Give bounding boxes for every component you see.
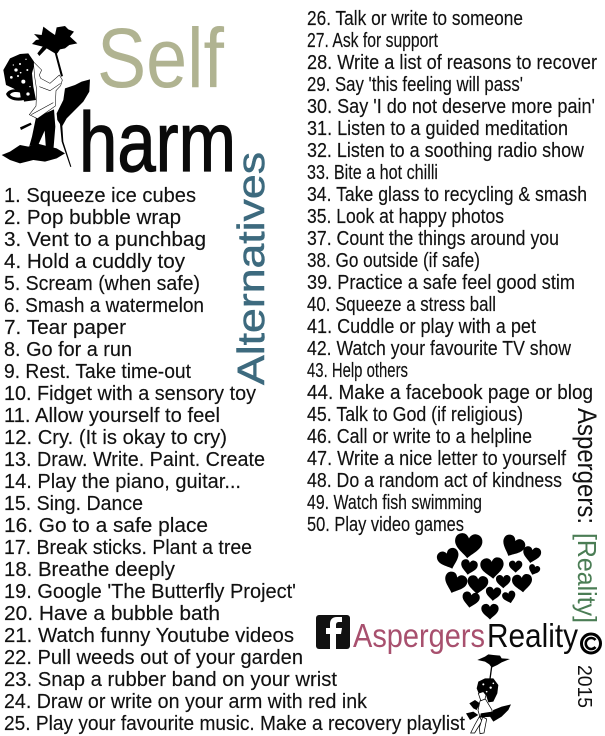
list: alternatives 26 to 50: 47. Write a nice letter to yourself	[307, 448, 566, 470]
icon: facebook logo	[316, 615, 350, 649]
list: alternatives 1 to 25: 10. Fidget with a sensory toy	[4, 383, 256, 405]
list: alternatives 26 to 50: 44. Make a facebook page or blog	[307, 382, 593, 404]
brand: AspergersReality: Reality	[487, 617, 578, 654]
list: alternatives 1 to 25: 8. Go for a run	[4, 339, 132, 361]
list: alternatives 26 to 50: 35. Look at happy photos	[307, 206, 504, 228]
list: alternatives 26 to 50: 48. Do a random act of kindness	[307, 470, 562, 492]
list: alternatives 1 to 25: 5. Scream (when safe)	[4, 273, 200, 295]
list: alternatives 1 to 25: 18. Breathe deeply	[4, 559, 175, 581]
list: alternatives 26 to 50: 29. Say 'this feeling will pass'	[307, 74, 523, 96]
list: alternatives 1 to 25: 25. Play your favourite music. Make a recovery playlist	[4, 713, 465, 735]
credit: Aspergers: [Reality] vertical: Aspergers:	[572, 408, 602, 524]
list: alternatives 26 to 50: 38. Go outside (if safe)	[307, 250, 480, 272]
list: alternatives 1 to 25: 24. Draw or write on your arm with red ink	[4, 691, 368, 713]
list: alternatives 26 to 50: 42. Watch your favourite TV show	[307, 338, 571, 360]
list: alternatives 1 to 25: 1. Squeeze ice cubes	[4, 185, 196, 207]
credit: Aspergers: [Reality] vertical	[572, 408, 602, 708]
credit: Aspergers: [Reality] vertical: 2015	[573, 665, 595, 708]
list: alternatives 1 to 25: 16. Go to a safe place	[4, 515, 208, 537]
list: alternatives 1 to 25: 11. Allow yourself to feel	[4, 405, 220, 427]
brand: AspergersReality	[353, 617, 578, 654]
list: alternatives 1 to 25: 22. Pull weeds out of your garden	[4, 647, 303, 669]
list: alternatives 1 to 25: 12. Cry. (It is okay to cry)	[4, 427, 227, 449]
list: alternatives 1 to 25: 4. Hold a cuddly toy	[4, 251, 185, 273]
title: Self: Self	[97, 11, 225, 105]
list: alternatives 26 to 50: 43. Help others	[307, 360, 408, 382]
list: alternatives 1 to 25: 17. Break sticks. Plant a tree	[4, 537, 252, 559]
icon: heart of hearts	[435, 533, 542, 619]
list: alternatives 1 to 25: 23. Snap a rubber band on your wrist	[4, 669, 337, 691]
list: alternatives 1 to 25: 6. Smash a watermelon	[4, 295, 204, 317]
list: alternatives 1 to 25: 14. Play the piano, guitar...	[4, 471, 241, 493]
list: alternatives 26 to 50: 49. Watch fish swimming	[307, 492, 482, 514]
list: alternatives 26 to 50: 40. Squeeze a stress ball	[307, 294, 496, 316]
list: alternatives 1 to 25: 20. Have a bubble bath	[4, 603, 220, 625]
list: alternatives 1 to 25: 9. Rest. Take time-out	[4, 361, 191, 383]
list: alternatives 26 to 50: 26. Talk or write to someone	[307, 8, 523, 30]
list: alternatives 1 to 25: 3. Vent to a punchbag	[4, 229, 206, 251]
list: alternatives 26 to 50: 46. Call or write to a helpline	[307, 426, 532, 448]
credit: Aspergers: [Reality] vertical: [Reality]	[572, 533, 602, 623]
list: alternatives 26 to 50: 50. Play video games	[307, 514, 464, 536]
title: Alternatives (vertical): Alternatives	[231, 152, 273, 385]
title: harm: harm	[79, 95, 236, 189]
list: alternatives 26 to 50: 39. Practice a safe feel good stim	[307, 272, 575, 294]
list: alternatives 1 to 25: 2. Pop bubble wrap	[4, 207, 181, 229]
icon: copyright symbol	[582, 634, 600, 653]
list: alternatives 1 to 25: 15. Sing. Dance	[4, 493, 143, 515]
brand: AspergersReality: Aspergers	[353, 617, 485, 654]
list: alternatives 1 to 25	[4, 185, 465, 735]
list: alternatives 1 to 25: 21. Watch funny Youtube videos	[4, 625, 294, 647]
list: alternatives 1 to 25: 13. Draw. Write. Paint. Create	[4, 449, 265, 471]
list: alternatives 26 to 50: 31. Listen to a guided meditation	[307, 118, 568, 140]
list: alternatives 1 to 25: 19. Google 'The Butterfly Project'	[4, 581, 296, 603]
list: alternatives 26 to 50: 37. Count the things around you	[307, 228, 559, 250]
list: alternatives 26 to 50: 41. Cuddle or play with a pet	[307, 316, 536, 338]
icon: small fairy under flower	[466, 654, 511, 734]
list: alternatives 26 to 50: 27. Ask for support	[307, 30, 438, 52]
list: alternatives 26 to 50: 33. Bite a hot chilli	[307, 162, 438, 184]
icon: fairy holding flower	[2, 26, 90, 167]
list: alternatives 26 to 50: 45. Talk to God (if religious)	[307, 404, 523, 426]
list: alternatives 26 to 50	[307, 8, 597, 536]
list: alternatives 1 to 25: 7. Tear paper	[4, 317, 126, 339]
